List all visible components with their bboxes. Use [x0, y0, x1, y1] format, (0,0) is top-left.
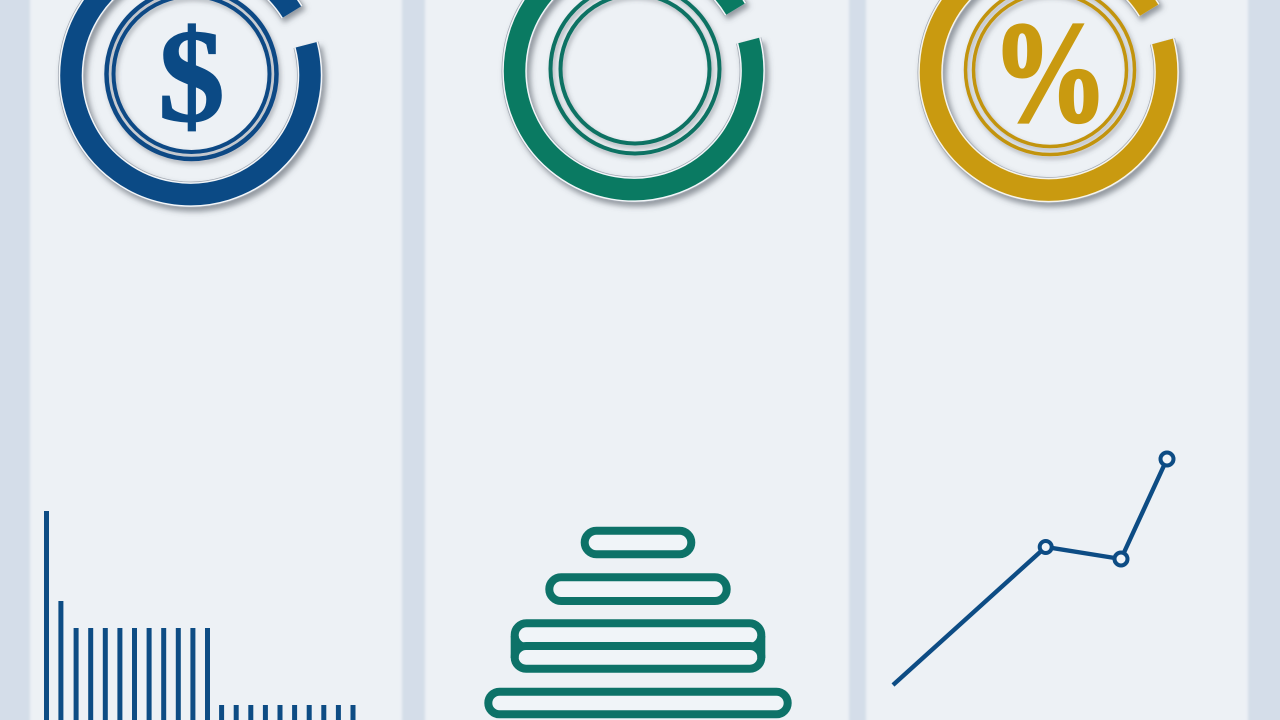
pyramid of rounded bars [488, 531, 788, 714]
icon: empty green ring [515, 0, 753, 190]
line chart [893, 452, 1174, 685]
icon: dollar ring [71, 0, 310, 195]
bar chart [44, 511, 356, 720]
panel: right [866, 0, 1248, 720]
panel: left [30, 0, 402, 720]
dollar sign: $ [158, 2, 225, 150]
panel: middle [425, 0, 849, 720]
data points [1040, 452, 1174, 566]
icon: percent ring [931, 0, 1167, 190]
